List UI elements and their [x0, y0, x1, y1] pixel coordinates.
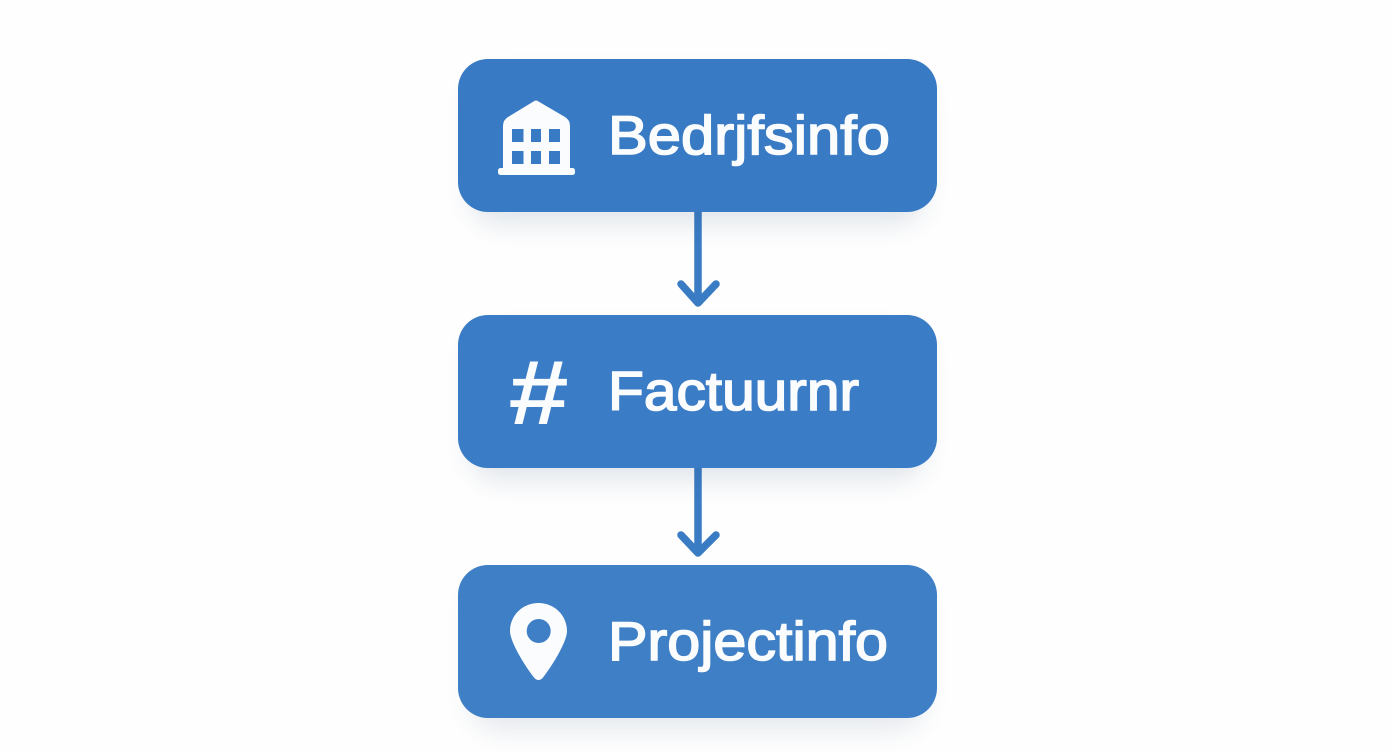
panel: Projectinfo: [458, 565, 937, 730]
heading: Factuurnr: Factuurnr: [608, 360, 859, 422]
panel: Factuurnr: [458, 315, 937, 480]
panel: Bedrjfsinfo: [458, 59, 937, 224]
icon: building: [498, 100, 575, 175]
arrow: invoice number to project info: [681, 468, 716, 553]
icon: location pin: [510, 603, 567, 680]
icon: hash: #: [507, 342, 568, 444]
heading: Projectinfo: Projectinfo: [608, 610, 888, 672]
heading: Bedrjfsinfo: Bedrjfsinfo: [608, 104, 890, 166]
arrow: company info to invoice number: [681, 212, 716, 303]
